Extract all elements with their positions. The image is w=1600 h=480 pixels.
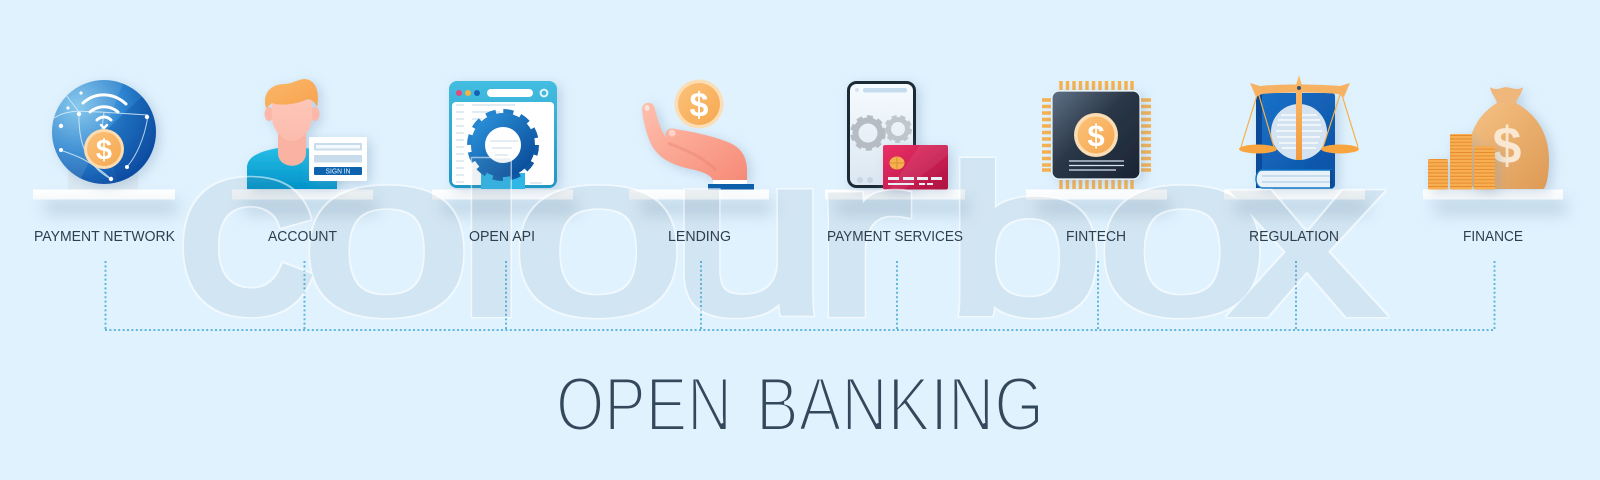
watermark: Colourbox: C xyxy=(180,143,313,352)
shelves row xyxy=(33,190,1567,214)
coin stacks xyxy=(1428,134,1495,190)
chip text lines xyxy=(1069,161,1124,170)
bag dollar sign: $ xyxy=(1493,117,1522,175)
item labels: FINTECH xyxy=(1066,228,1126,245)
item labels xyxy=(34,228,1523,245)
infographic canvas xyxy=(33,75,1570,430)
gear xyxy=(470,112,536,189)
title xyxy=(556,362,1044,448)
watermark: Colourbox: o xyxy=(303,106,471,360)
dotted connector bracket xyxy=(105,261,1495,330)
sign-in card: SIGN IN xyxy=(326,168,350,175)
icon: payment services phone with gears and card xyxy=(848,82,948,190)
item labels: REGULATION xyxy=(1249,228,1339,245)
icon: account person with sign-in card xyxy=(247,79,367,189)
title: OPEN xyxy=(556,362,732,448)
icon: payment network globe xyxy=(50,78,160,190)
icon: open API browser window with gear xyxy=(449,81,557,189)
icon: dollar coin: $ xyxy=(96,134,112,166)
credit card xyxy=(883,145,948,190)
cuff xyxy=(708,180,754,190)
icon: finance money bag with coin stacks xyxy=(1428,87,1549,190)
item labels: OPEN API xyxy=(469,228,535,245)
item labels: PAYMENT SERVICES xyxy=(827,228,963,245)
scales xyxy=(1239,75,1359,160)
watermark: Colourbox: o xyxy=(1098,106,1267,360)
watermark: Colourbox xyxy=(180,106,1382,361)
watermark: Colourbox: o xyxy=(512,107,684,360)
icon: fintech processor chip xyxy=(1042,81,1151,189)
grey gears xyxy=(852,116,910,149)
watermark: Colourbox: x xyxy=(1233,109,1382,361)
watermark: Colourbox: r xyxy=(814,113,911,360)
watermark: Colourbox: b xyxy=(946,125,1103,357)
icon: wifi arcs xyxy=(83,95,126,128)
title: BANKING xyxy=(756,362,1044,448)
dollar coin: $ xyxy=(1087,118,1105,153)
dollar coin: $ xyxy=(690,86,709,124)
icon: lending hand holding coin xyxy=(642,80,754,190)
item labels: ACCOUNT xyxy=(268,228,337,245)
watermark: Colourbox: l xyxy=(457,125,526,358)
item labels: LENDING xyxy=(668,228,731,245)
icon: regulation law book with scales xyxy=(1239,75,1359,188)
item labels: PAYMENT NETWORK xyxy=(34,228,175,245)
watermark: Colourbox: u xyxy=(672,109,827,360)
item labels: FINANCE xyxy=(1463,228,1523,245)
